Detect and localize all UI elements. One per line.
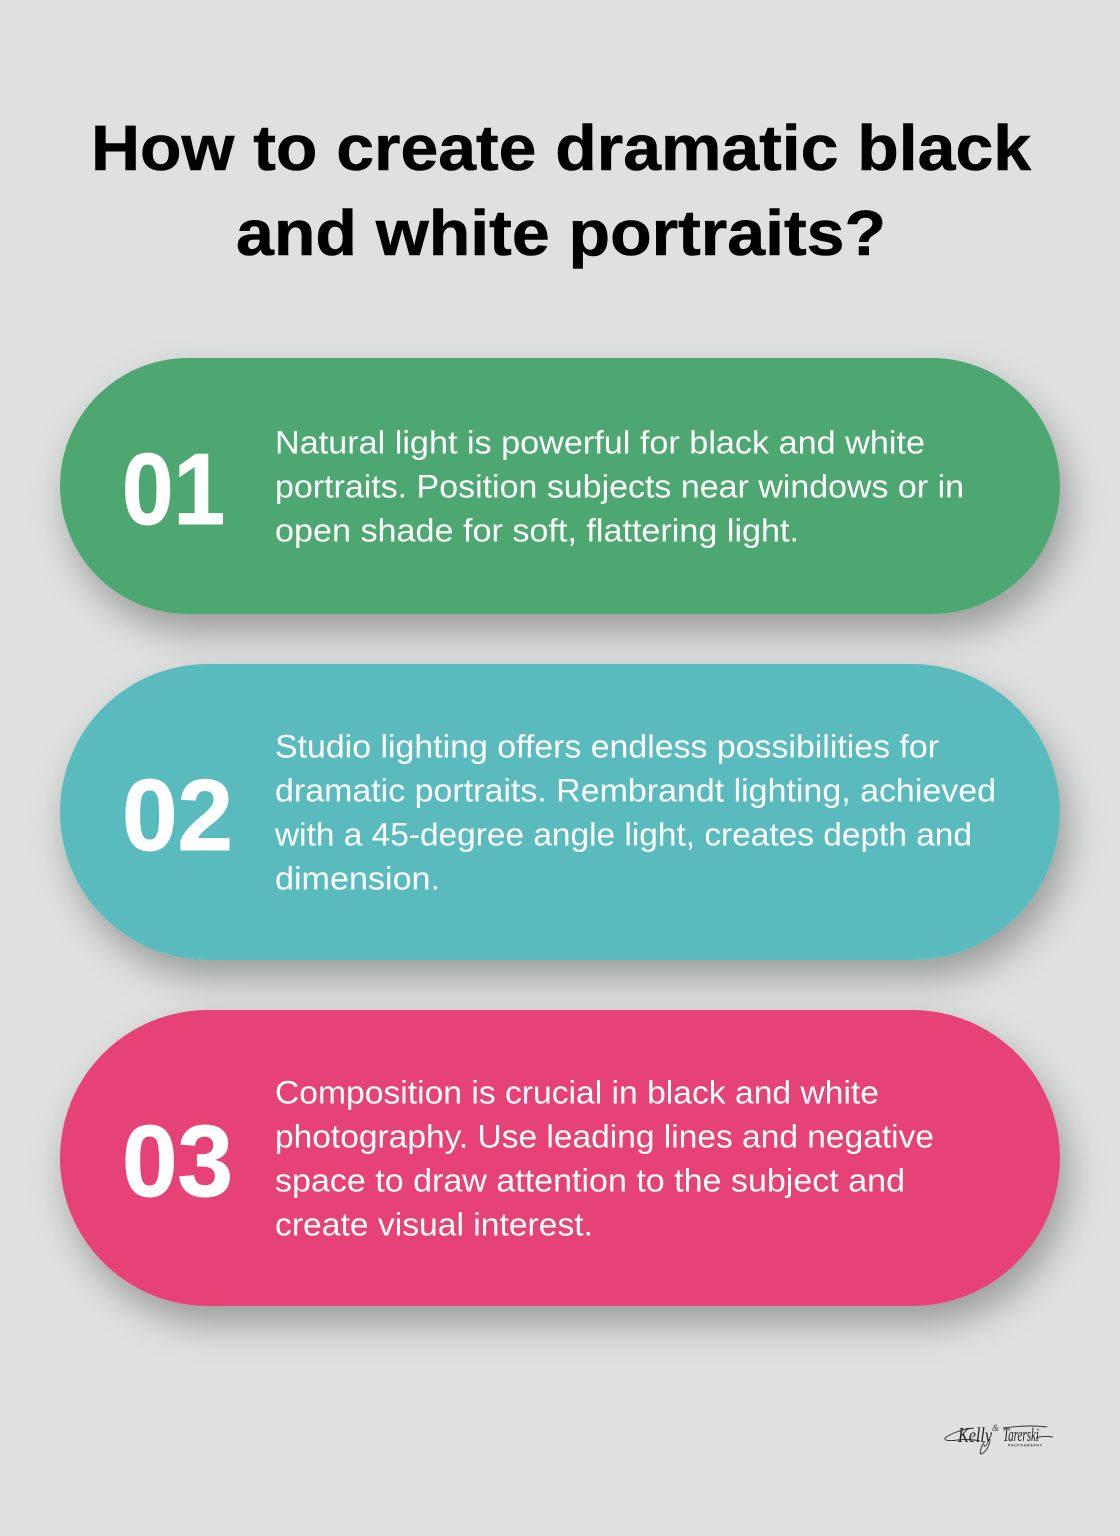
text block: studio lighting: with a 45-degree angle light, creates depth and xyxy=(274,816,972,852)
text block: studio lighting: dimension. xyxy=(275,860,440,896)
logo: signature: Tarerski xyxy=(1003,1425,1039,1446)
text block: studio lighting: dramatic portraits. Rembrandt lighting, achieved xyxy=(275,772,996,808)
panel: step 01 natural light xyxy=(60,358,1060,614)
logo: signature: Kelly xyxy=(957,1423,993,1447)
panel: step 02 studio lighting xyxy=(60,664,1060,960)
text block: natural light xyxy=(275,424,964,548)
number 01: 01 xyxy=(122,434,225,546)
title xyxy=(91,112,1031,269)
logo: signature: PHOTOGRAPHY xyxy=(1008,1444,1043,1448)
text block: natural light: Natural light is powerful for black and white xyxy=(275,424,925,460)
text block: composition: Composition is crucial in black and white xyxy=(275,1074,879,1110)
text block: natural light: open shade for soft, flattering light. xyxy=(275,512,799,548)
panel: step 03 composition xyxy=(60,1010,1060,1306)
text block: studio lighting: Studio lighting offers endless possibilities for xyxy=(275,728,939,764)
title: How to create dramatic black xyxy=(91,112,1031,184)
text block: composition xyxy=(275,1074,934,1242)
text block: composition: create visual interest. xyxy=(275,1206,593,1242)
number 03: 03 xyxy=(122,1106,233,1218)
title: and white portraits? xyxy=(236,197,886,269)
text block: studio lighting xyxy=(274,728,996,896)
text block: composition: photography. Use leading lines and negative xyxy=(275,1118,934,1154)
logo: signature: & xyxy=(992,1423,999,1433)
text block: composition: space to draw attention to the subject and xyxy=(275,1162,905,1198)
number 02: 02 xyxy=(122,760,233,872)
logo: signature xyxy=(945,1423,1053,1454)
text block: natural light: portraits. Position subjects near windows or in xyxy=(275,468,964,504)
